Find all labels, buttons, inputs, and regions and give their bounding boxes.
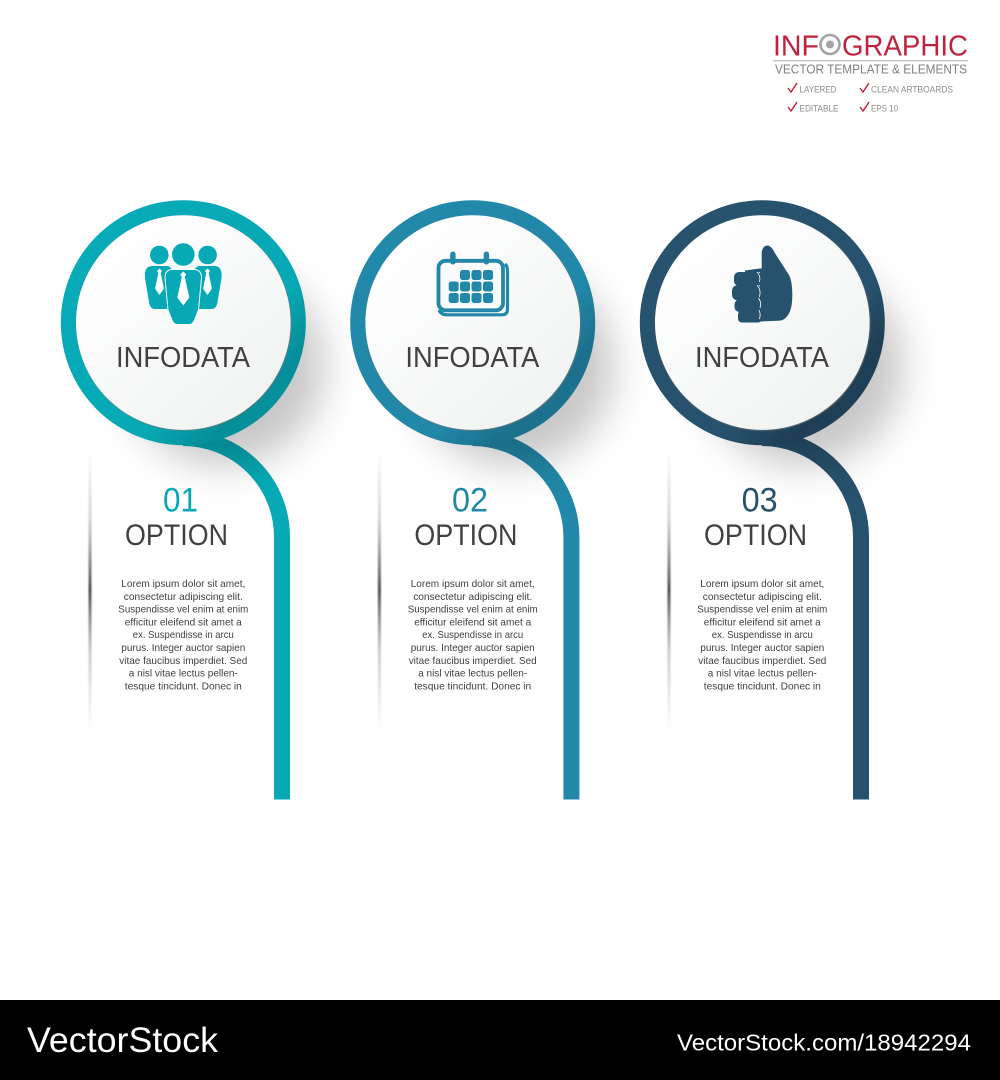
number 02: 02 [452,482,488,520]
body text: Lorem ipsum dolor sit amet, [700,578,824,590]
body text: Lorem ipsum dolor sit amet, [121,578,245,590]
ring [640,200,885,445]
logo title: GRAPHIC [842,30,968,62]
logo subtitle: VECTOR TEMPLATE & ELEMENTS [775,62,967,76]
connector tail [183,438,282,800]
inner disc [365,215,580,430]
body text: Suspendisse vel enim at enim [697,604,828,616]
panel: option 02 [350,200,613,800]
ring drop shadow [703,266,903,466]
logo title [773,30,968,62]
body text: consectetur adipiscing elit. [124,591,243,603]
option heading: OPTION [414,519,517,552]
body text: tesque tincidunt. Donec in [125,680,242,692]
option heading: OPTION [704,519,807,552]
body text: efficitur eleifend sit amet a [414,616,531,628]
body text: consectetur adipiscing elit. [703,591,822,603]
body text: vitae faucibus imperdiet. Sed [409,655,537,667]
body text: tesque tincidunt. Donec in [414,680,531,692]
logo checklist: EDITABLE [800,104,838,114]
logo rule [773,60,968,62]
body text: Suspendisse vel enim at enim [118,604,249,616]
body text: Lorem ipsum dolor sit amet, [411,578,535,590]
body text: purus. Integer auctor sapien [700,642,824,654]
body text [697,578,828,692]
icon: calendar [438,252,508,315]
body text: vitae faucibus imperdiet. Sed [698,655,826,667]
logo title: INF [773,30,819,62]
left edge shadow [378,450,381,730]
body text: ex. Suspendisse in arcu [133,629,234,641]
panel: option 03 [640,200,903,800]
body text [118,578,249,692]
footer url: VectorStock.com/18942294 [677,1030,971,1056]
body text: purus. Integer auctor sapien [121,642,245,654]
body text: a nisl vitae lectus pellen- [708,668,817,680]
infodata label: INFODATA [116,342,251,374]
body text: purus. Integer auctor sapien [411,642,535,654]
logo checklist [788,83,953,114]
body text: a nisl vitae lectus pellen- [418,668,528,680]
body text: efficitur eleifend sit amet a [125,616,242,628]
number 01: 01 [163,482,198,520]
body text: ex. Suspendisse in arcu [422,629,523,641]
body text: Suspendisse vel enim at enim [408,604,538,616]
logo checklist: EPS 10 [871,104,898,114]
logo: infographic vector template [773,30,968,114]
left edge shadow [88,450,92,730]
ring drop shadow [413,266,613,466]
body text: consectetur adipiscing elit. [413,591,532,603]
ring [61,200,306,445]
inner disc [655,215,870,430]
logo checklist: CLEAN ARTBOARDS [871,84,953,94]
connector tail [472,438,571,800]
body text: tesque tincidunt. Donec in [704,680,821,692]
icon: business people [145,243,222,324]
body text: a nisl vitae lectus pellen- [129,668,238,680]
number 03: 03 [742,482,778,520]
logo checklist: LAYERED [800,84,837,94]
ring [350,200,595,445]
body text: efficitur eleifend sit amet a [704,616,821,628]
body text: ex. Suspendisse in arcu [712,629,813,641]
connector tail [762,438,861,800]
logo target icon [820,35,840,54]
body text: vitae faucibus imperdiet. Sed [119,655,247,667]
body text [408,578,538,692]
option heading: OPTION [125,519,228,552]
footer brand: VectorStock [27,1021,219,1060]
ring drop shadow [124,266,324,466]
infodata label: INFODATA [695,342,830,374]
left edge shadow [668,450,670,730]
infodata label: INFODATA [405,342,540,374]
icon: thumbs up [732,245,792,322]
inner disc [76,215,291,430]
panel: option 01 [61,200,324,800]
footer bar [0,1000,1000,1080]
